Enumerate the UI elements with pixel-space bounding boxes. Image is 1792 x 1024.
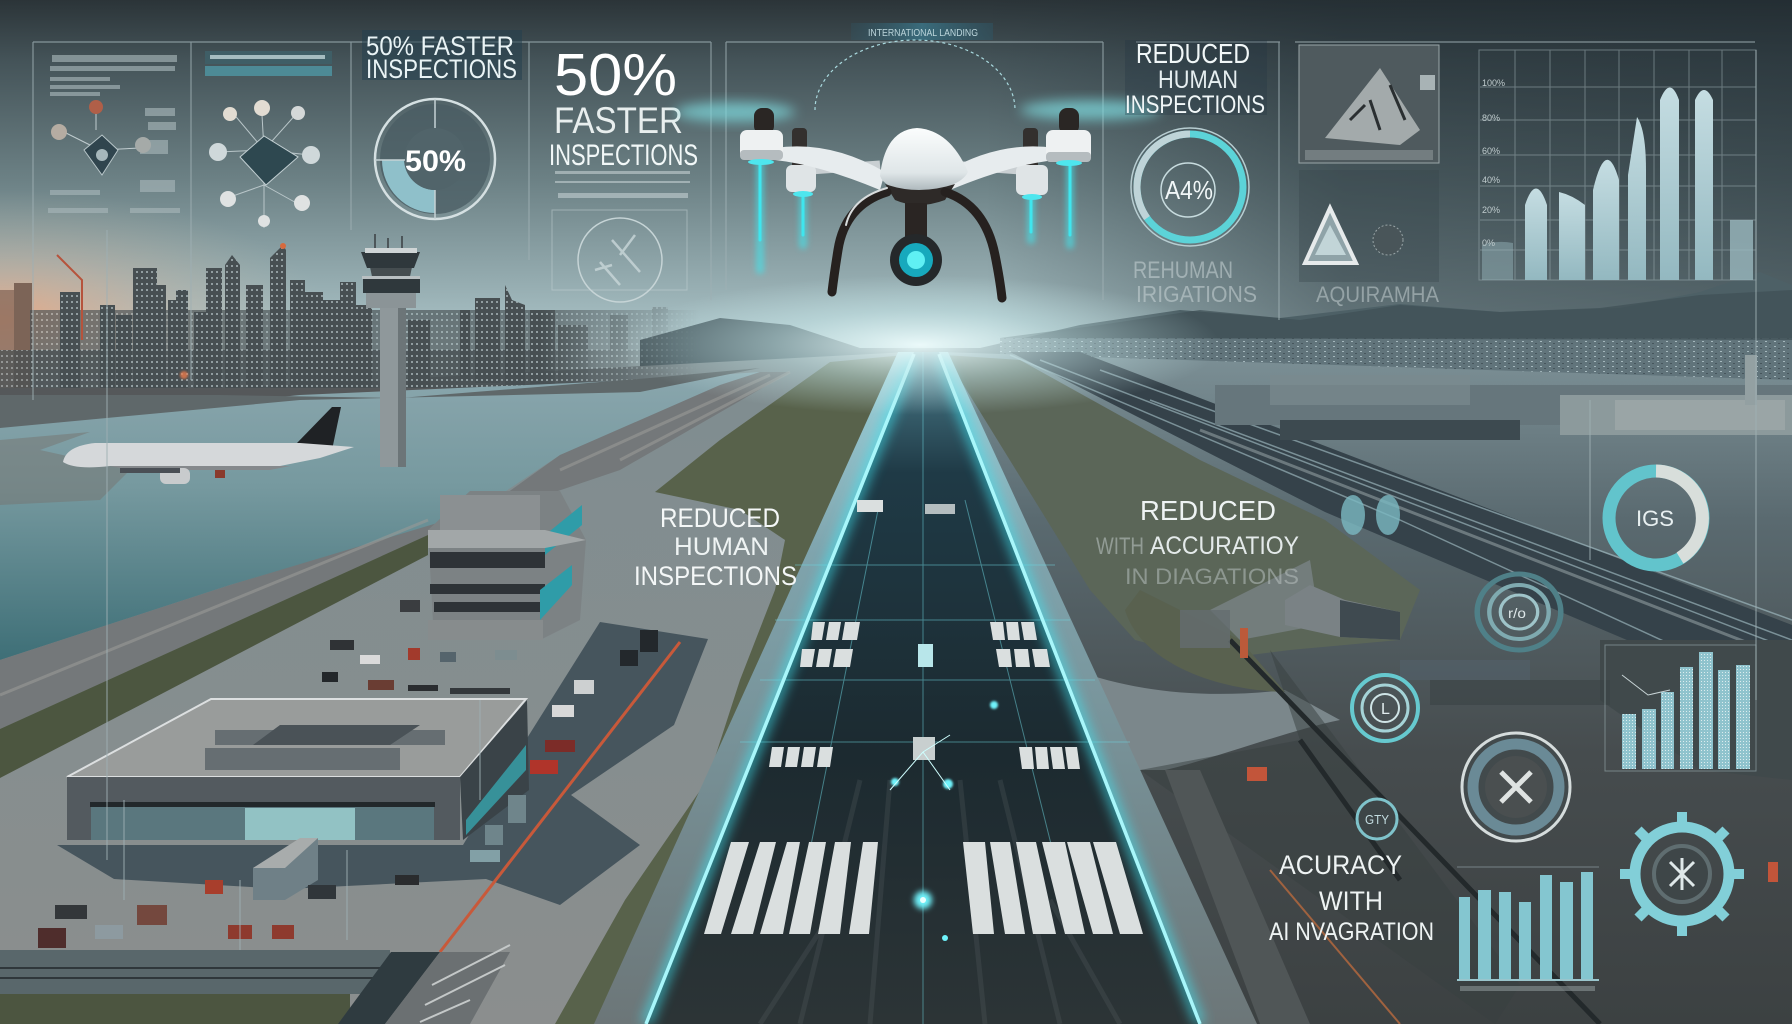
heading: big 50% faster inspections: 50%	[554, 42, 677, 108]
grass field left	[555, 355, 905, 1024]
drone body	[880, 128, 968, 192]
donut gauge A4%	[1131, 128, 1249, 246]
sand strip streaks	[0, 372, 790, 695]
control building	[428, 491, 586, 640]
icon: small code circle: GTY	[1365, 812, 1389, 827]
city skyline	[0, 243, 710, 402]
heading: reduced human inspections top right	[1125, 38, 1267, 119]
heading: reduced human inspections top right: INSPECTIONS	[1125, 91, 1265, 119]
chart axis labels: 0%	[1482, 238, 1495, 248]
plane on water	[63, 407, 354, 484]
heading: reduced human inspections top right: HUMAN	[1158, 66, 1238, 94]
sand strip	[0, 372, 790, 729]
apron shadow zone	[57, 622, 708, 905]
panel: network hub icon	[209, 100, 320, 228]
front arms	[775, 146, 885, 190]
grass strip	[0, 535, 428, 778]
label reduced right mid: REDUCED	[1140, 495, 1276, 526]
right roads	[1010, 352, 1792, 710]
vehicles on apron	[38, 600, 658, 948]
panel: text blocks far left	[48, 55, 180, 213]
heading: big 50% faster inspections	[549, 42, 698, 172]
runway threshold markings	[704, 500, 1143, 934]
icon: small code circle	[1357, 799, 1397, 839]
label accuracy with AI navigation: WITH	[1319, 886, 1383, 916]
chart axis labels: 20%	[1482, 205, 1500, 215]
rear motors	[786, 128, 1048, 200]
faded label rehuman: REHUMAN	[1133, 257, 1233, 284]
faded label rehuman: IRIGATIONS	[1136, 281, 1257, 307]
faded label rehuman	[1133, 257, 1257, 307]
runway grid lines	[740, 352, 1130, 1024]
icon: concentric rings lower: L	[1381, 701, 1390, 718]
heading: reduced human inspections top right: REDUCED	[1136, 38, 1250, 69]
icon: tools circle	[1462, 733, 1570, 841]
heading: big 50% faster inspections: FASTER	[554, 100, 683, 141]
truck roof	[253, 838, 318, 868]
top center label pill: INTERNATIONAL LANDING	[868, 28, 978, 39]
far shore and haze	[0, 368, 760, 428]
background sky	[0, 0, 1792, 450]
bar chart lower right	[1457, 867, 1599, 991]
left ground base	[0, 352, 908, 1024]
rotor blur left	[675, 102, 795, 122]
chart axis labels: 60%	[1482, 146, 1500, 156]
label reduced human inspections left mid: REDUCED	[660, 503, 780, 533]
sensor arc	[815, 40, 1015, 110]
front motors	[740, 108, 1091, 166]
label accuracy with AI navigation	[1269, 850, 1434, 946]
icon: concentric rings upper	[1477, 574, 1561, 650]
icon: concentric rings lower	[1352, 675, 1418, 741]
rotor blur right	[1020, 100, 1160, 120]
right far buildings	[1215, 355, 1792, 440]
heading: big 50% faster inspections: INSPECTIONS	[549, 139, 698, 172]
water	[0, 372, 760, 660]
distant mountains and right city	[640, 272, 1792, 420]
label reduced human inspections left mid: INSPECTIONS	[634, 561, 797, 591]
orange perimeter line	[440, 642, 680, 952]
donut gauge A4%: A4%	[1165, 175, 1213, 205]
chart axis labels: 40%	[1482, 175, 1500, 185]
mudflat near plane	[0, 432, 130, 505]
heading: 50% faster inspections small: 50% FASTER	[366, 31, 514, 61]
chart axis labels: 100%	[1482, 78, 1505, 88]
donut gauge lower right: IGS	[1636, 506, 1674, 531]
label reduced right mid: ACCURATIOY	[1150, 532, 1299, 560]
panel: circular schematic	[552, 210, 687, 302]
service ramp	[338, 945, 510, 1024]
label reduced right mid	[1096, 495, 1299, 589]
rear arms	[800, 165, 1032, 180]
label accuracy with AI navigation: ACURACY	[1279, 850, 1402, 880]
faded label aquiramha: AQUIRAMHA	[1316, 282, 1439, 307]
panel: small network diagram left	[51, 100, 151, 175]
thrust beams	[760, 163, 1070, 270]
drone	[675, 40, 1160, 298]
panel: network diagram header bar	[205, 51, 332, 76]
right grass field	[945, 355, 1420, 660]
camera gimbal	[890, 203, 942, 286]
donut gauge lower right	[1609, 471, 1703, 565]
bar chart large	[1479, 50, 1756, 280]
label reduced right mid: IN DIAGATIONS	[1125, 564, 1299, 589]
heading: 50% faster inspections small	[362, 30, 522, 84]
landing legs	[832, 188, 1002, 298]
runway glow nodes	[890, 701, 998, 941]
heading: 50% faster inspections small: INSPECTIONS	[366, 54, 517, 84]
runway surface	[646, 352, 1200, 1024]
warning triangle icon	[1299, 170, 1439, 282]
icon: concentric rings upper: r/o	[1508, 607, 1526, 622]
horizon haze	[620, 275, 1220, 415]
hangar building	[67, 699, 529, 900]
label reduced right mid: WITH	[1096, 533, 1144, 560]
control tower left	[361, 234, 420, 467]
runway shoulders	[594, 352, 1257, 1024]
perimeter fence	[0, 950, 390, 1024]
label reduced human inspections left mid	[634, 503, 797, 591]
taxiway and lower right	[1075, 560, 1792, 1024]
chart axis labels: 80%	[1482, 113, 1500, 123]
low buildings right	[1180, 585, 1778, 882]
label accuracy with AI navigation: AI NVAGRATION	[1269, 918, 1434, 946]
delivery truck	[253, 838, 318, 900]
small teal drop icons	[1341, 495, 1400, 535]
donut gauge 50%: 50%	[405, 145, 466, 178]
label reduced human inspections left mid: HUMAN	[674, 533, 769, 561]
right ground base	[940, 352, 1792, 1024]
runway tire streaks	[760, 780, 1120, 1024]
top center label pill	[851, 23, 993, 40]
icon: gear	[1620, 812, 1744, 936]
panel: terrain image	[1299, 45, 1439, 163]
bar chart middle right	[1605, 645, 1756, 771]
panel: faint text strips	[555, 171, 690, 198]
chart axis labels	[1482, 78, 1505, 248]
donut gauge 50%	[375, 99, 495, 219]
runway edge glow	[646, 354, 1200, 1024]
